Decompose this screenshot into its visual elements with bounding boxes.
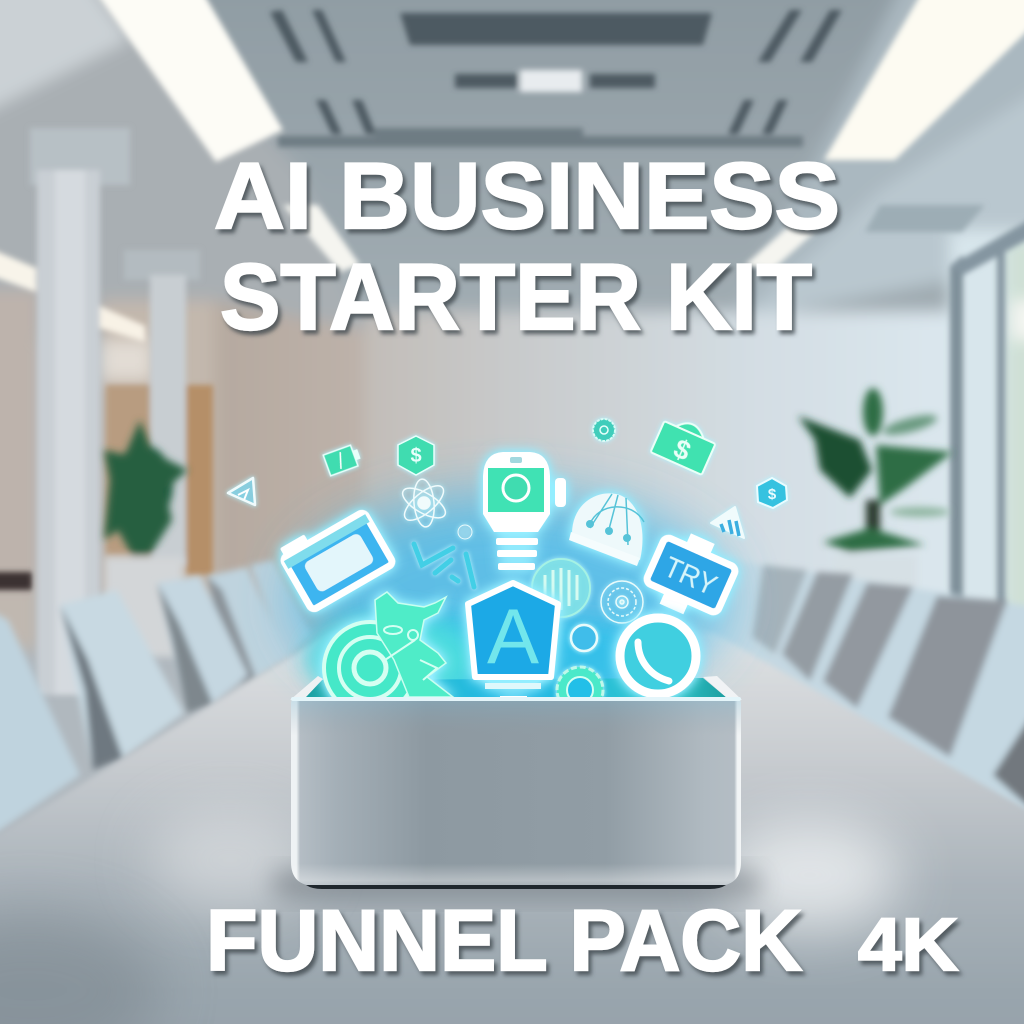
icon: A shield: A bbox=[487, 592, 539, 680]
icon: small coin bbox=[458, 525, 472, 539]
icon: bar triangle bbox=[711, 507, 744, 538]
icon: dollar shield small: $ bbox=[768, 486, 777, 503]
icon: folder card bbox=[277, 503, 394, 610]
icon: dollar hexagon: $ bbox=[410, 445, 422, 467]
room: ceiling, walls and columns bbox=[0, 0, 1024, 652]
room details: vents, door, frames and columns bbox=[0, 0, 1024, 695]
icon: battery bbox=[323, 444, 363, 476]
icon: lightbulb device bbox=[483, 452, 566, 570]
icon: gear bbox=[557, 667, 603, 713]
icon: dome globe bbox=[569, 493, 644, 566]
box interior bbox=[305, 678, 727, 698]
chairs right bbox=[700, 560, 1024, 830]
icon: dollar shield small bbox=[757, 478, 787, 508]
table bbox=[0, 632, 1024, 1024]
plant left bbox=[104, 420, 188, 657]
title line: STARTER KIT: STARTER KIT bbox=[220, 244, 812, 349]
icon: A shield bbox=[468, 583, 558, 700]
plant right bbox=[798, 388, 953, 635]
icon: dollar bag: $ bbox=[669, 433, 695, 467]
icon: target with creature bbox=[324, 592, 453, 714]
title bbox=[214, 143, 840, 349]
icon: dollar hexagon bbox=[398, 436, 434, 475]
label: 4K: 4K bbox=[858, 903, 958, 986]
chairs left bbox=[0, 560, 312, 850]
silver box bbox=[290, 676, 742, 889]
icon: phone circle bbox=[620, 618, 696, 694]
glow behind icons bbox=[295, 495, 725, 705]
icon: dollar bag bbox=[651, 413, 719, 475]
icon: tools bbox=[414, 544, 474, 587]
icon: warning triangle bbox=[228, 478, 255, 505]
label: FUNNEL PACK: FUNNEL PACK bbox=[206, 893, 802, 989]
icon: TRY badge: TRY bbox=[659, 551, 721, 602]
icon: atom bbox=[398, 478, 450, 528]
icon: bubble bbox=[571, 625, 597, 651]
icon: small gear coin bbox=[593, 419, 615, 441]
icon: lens disc bbox=[601, 581, 643, 623]
table highlights and shadow bbox=[0, 810, 900, 1024]
icon: TRY badge bbox=[640, 524, 742, 626]
title line: AI BUSINESS: AI BUSINESS bbox=[214, 143, 840, 248]
icon: striped sphere bbox=[532, 559, 590, 617]
